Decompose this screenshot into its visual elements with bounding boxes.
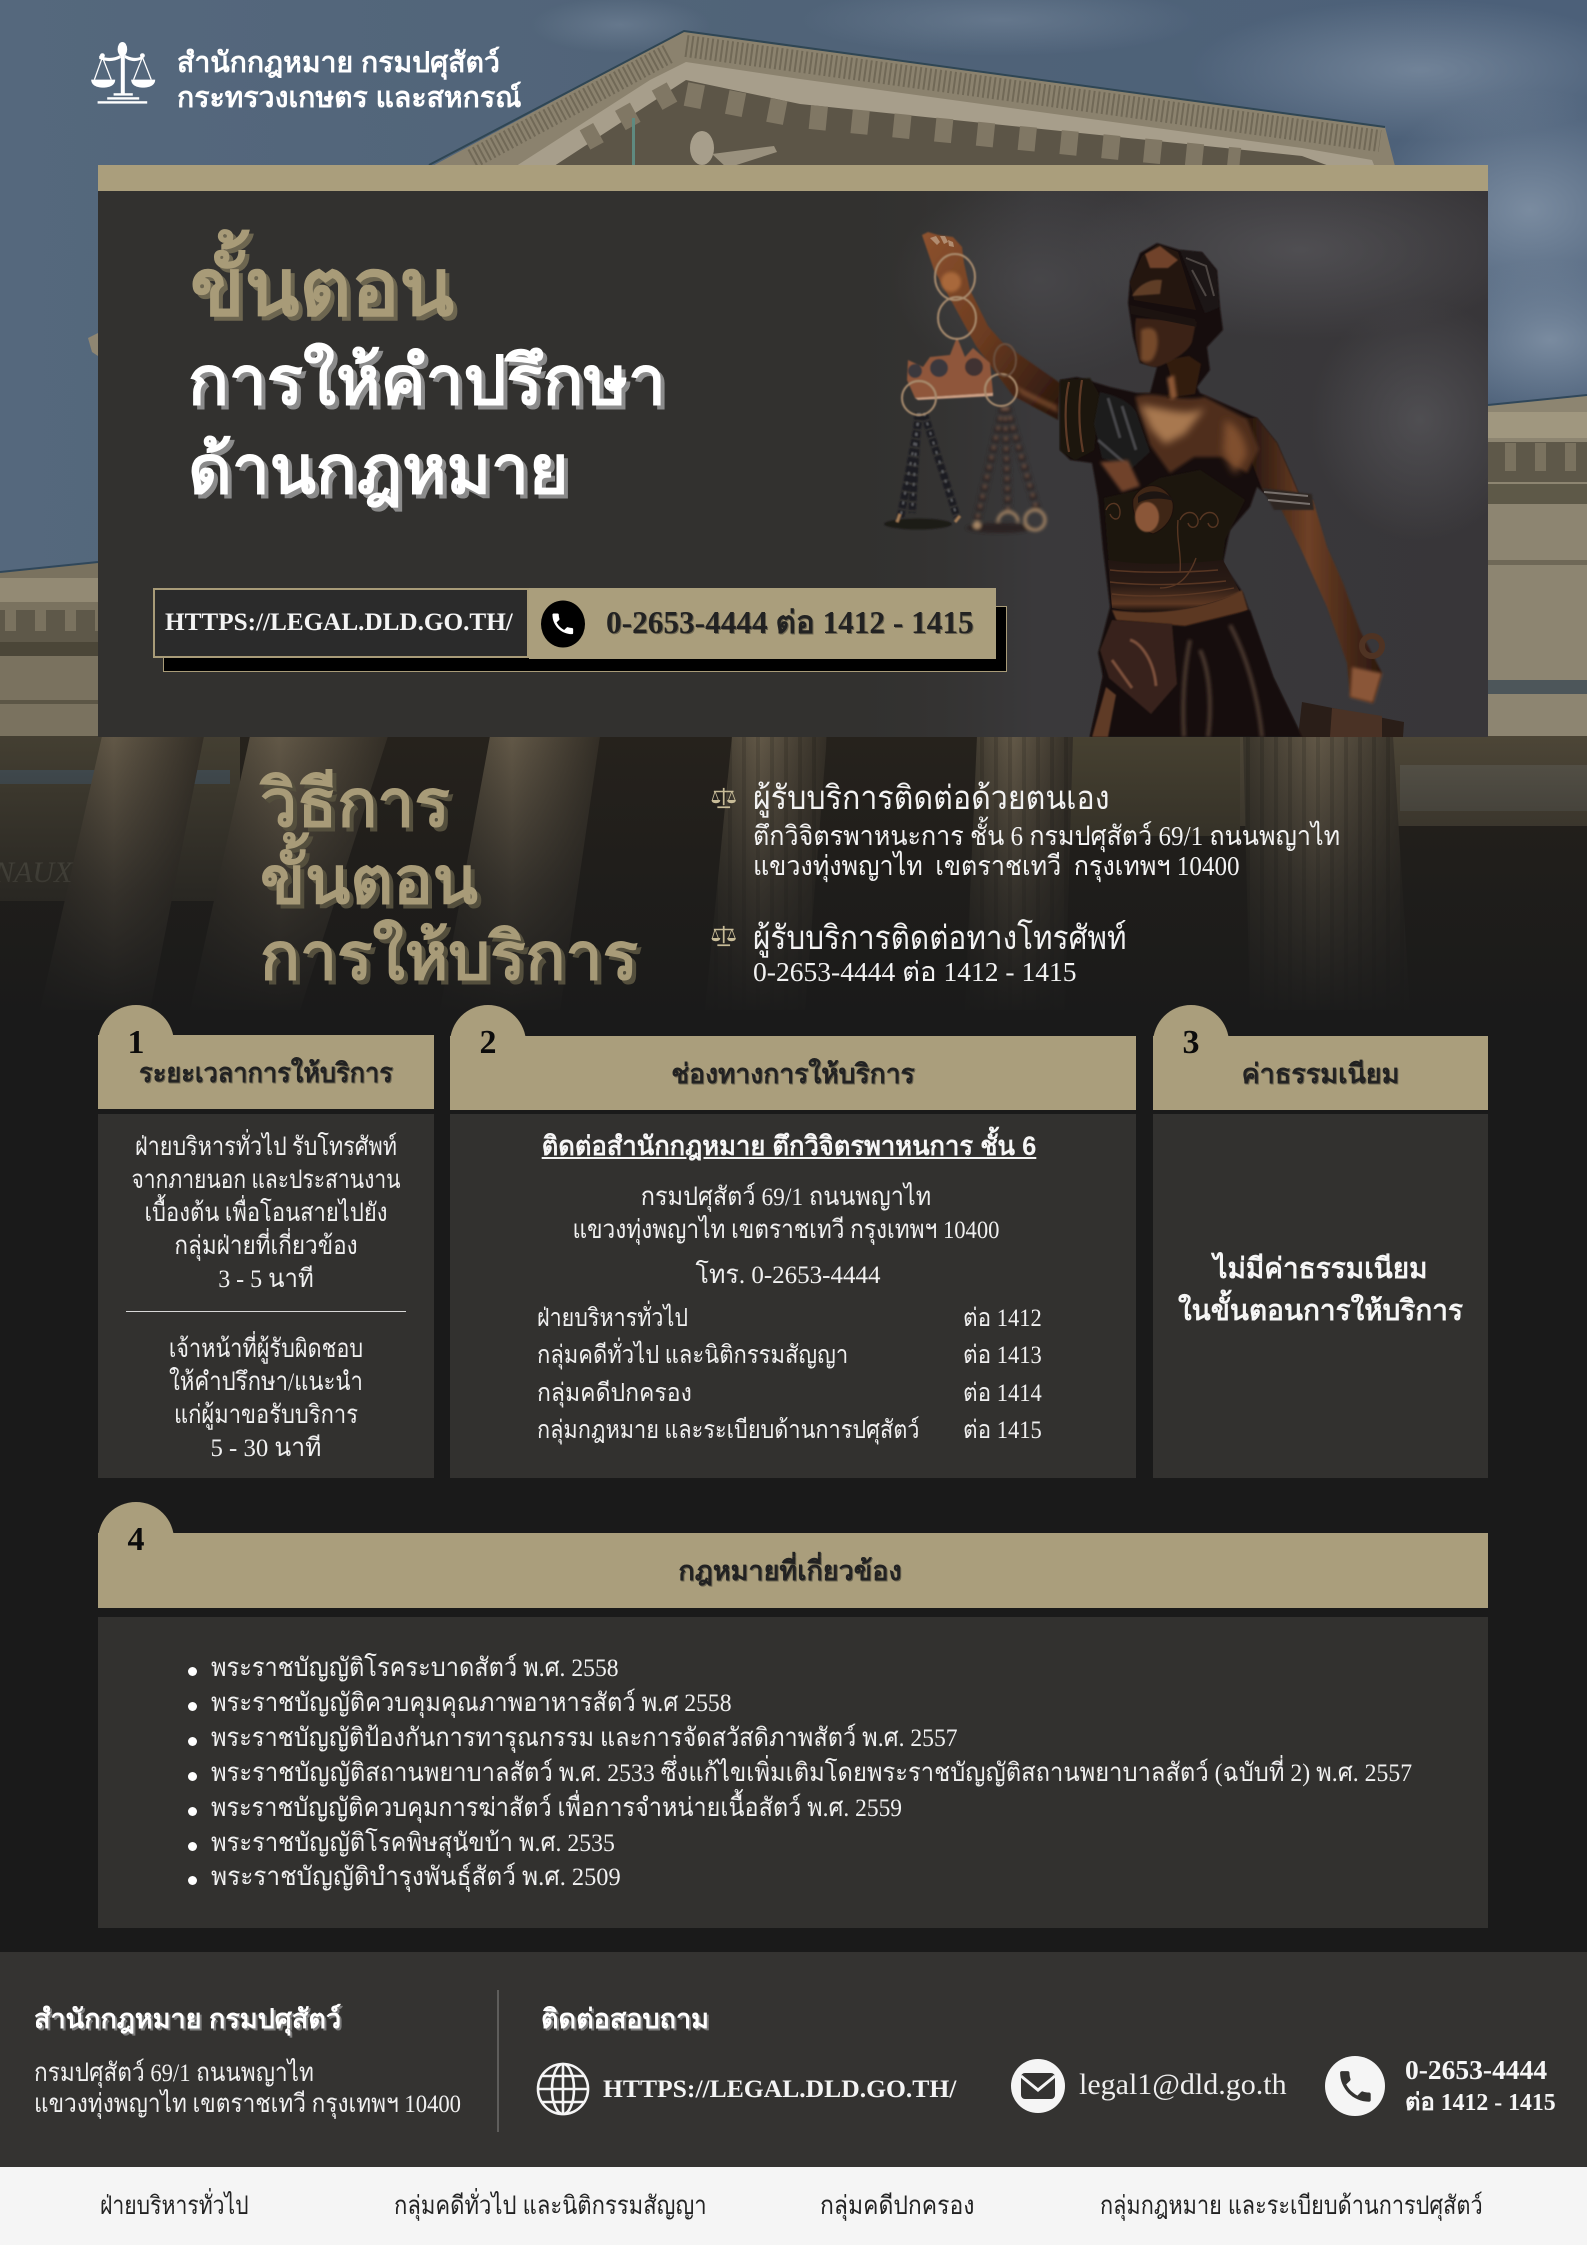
card 2 header: [450, 1036, 1136, 1110]
contact bar: [153, 588, 1007, 672]
in-person heading: ผู้รับบริการติดต่อด้วยตนเอง: [753, 779, 1110, 816]
section heading: service method: วิธีการ: [260, 766, 450, 840]
first step text: [131, 1129, 401, 1292]
list of acts: พระราชบัญญัติบำรุงพันธุ์สัตว์ พ.ศ. 2509: [211, 1862, 621, 1891]
card 2 body: [450, 1114, 1136, 1478]
section heading: service method: [259, 766, 642, 993]
first step text: 3 - 5 นาที: [218, 1264, 314, 1292]
background photo: courthouse and sky: [0, 0, 1587, 982]
footer contact panel: [0, 1952, 1587, 2167]
pediment: [425, 31, 1396, 170]
card 4: related laws: [98, 1502, 1488, 1928]
card 1 number tab: [98, 1005, 174, 1065]
card 2: service channels: [450, 1005, 1136, 1478]
office address: [573, 1182, 999, 1245]
extension names: ฝ่ายบริหารทั่วไป: [537, 1305, 688, 1332]
first step text: จากภายนอก และประสานงาน: [131, 1164, 401, 1194]
list of acts: พระราชบัญญัติสถานพยาบาลสัตว์ พ.ศ. 2533 ซึ่งแก้ไขเพิ่มเติมโดยพระราชบัญญัติสถานพยาบาลสัตว์ (ฉบับที่ 2) พ.ศ. 2557: [211, 1758, 1412, 1787]
second step text: แก่ผู้มาขอรับบริการ: [174, 1400, 358, 1428]
card 1 title: ระยะเวลาการให้บริการ: [139, 1058, 393, 1088]
division: general cases: กลุ่มคดีทั่วไป และนิติกรรมสัญญา: [394, 2192, 707, 2220]
section heading: service method: ขั้นตอน: [260, 842, 478, 916]
card 1 number: 1: [128, 1024, 144, 1061]
bodice: [1104, 470, 1245, 608]
section heading: service method: การให้บริการ: [260, 919, 638, 993]
extension names: กลุ่มคดีปกครอง: [537, 1380, 692, 1407]
left wing: [0, 562, 98, 736]
icon: scales of justice logo: [91, 42, 156, 104]
list of acts: [188, 1653, 1412, 1892]
beam with rings: [902, 254, 1017, 415]
agency name: [177, 46, 522, 114]
extension names: กลุ่มกฎหมาย และระเบียบด้านการปศุสัตว์: [537, 1417, 919, 1444]
website link box: HTTPS://LEGAL.DLD.GO.TH/: [165, 609, 513, 636]
division: general administration: ฝ่ายบริหารทั่วไป: [100, 2192, 249, 2220]
first step text: ฝ่ายบริหารทั่วไป รับโทรศัพท์: [135, 1132, 397, 1160]
list of acts: พระราชบัญญัติควบคุมคุณภาพอาหารสัตว์ พ.ศ 2558: [211, 1688, 732, 1717]
card 3 number tab: [1153, 1005, 1229, 1065]
hero panel: [98, 165, 1488, 737]
footer agency heading: สำนักกฎหมาย กรมปศุสัตว์: [34, 2004, 341, 2034]
chest highlights: [1135, 394, 1259, 473]
extension numbers: ต่อ 1413: [963, 1342, 1042, 1369]
website link box: [153, 588, 529, 658]
icon: phone: [1325, 2056, 1385, 2116]
card 4 number: 4: [128, 1521, 144, 1558]
footer phone numbers: ต่อ 1412 - 1415: [1405, 2090, 1556, 2116]
colonnade: [0, 736, 1587, 1040]
in-person address: แขวงทุ่งพญาไท เขตราชเทวี กรุงเทพฯ 10400: [753, 851, 1240, 881]
phone number: 0-2653-4444 ต่อ 1412 - 1415: [606, 605, 974, 640]
list of acts: พระราชบัญญัติป้องกันการทารุณกรรม และการจัดสวัสดิภาพสัตว์ พ.ศ. 2557: [211, 1723, 958, 1752]
footer phone numbers: [1405, 2054, 1556, 2116]
footer website: HTTPS://LEGAL.DLD.GO.TH/: [603, 2074, 956, 2103]
office phone: โทร. 0-2653-4444: [696, 1260, 880, 1289]
list of acts: พระราชบัญญัติโรคระบาดสัตว์ พ.ศ. 2558: [211, 1653, 619, 1682]
no fee statement: ในขั้นตอนการให้บริการ: [1178, 1295, 1463, 1327]
second step text: เจ้าหน้าที่ผู้รับผิดชอบ: [169, 1334, 363, 1362]
footer contact heading: ติดต่อสอบถาม: [541, 2004, 709, 2034]
title: gold line: ขั้นตอน: [190, 243, 454, 332]
bar shadow: [163, 606, 1007, 672]
list of acts: พระราชบัญญัติควบคุมการฆ่าสัตว์ เพื่อการจำหน่ายเนื้อสัตว์ พ.ศ. 2559: [211, 1793, 902, 1822]
second step text: 5 - 30 นาที: [210, 1432, 322, 1462]
phone box: [529, 588, 996, 659]
telephone number: 0-2653-4444 ต่อ 1412 - 1415: [753, 957, 1077, 987]
card 4 body: [98, 1617, 1488, 1928]
title: white lines: ด้านกฎหมาย: [188, 433, 569, 508]
extension numbers: ต่อ 1414: [963, 1380, 1042, 1407]
card 3 number: 3: [1182, 1024, 1200, 1061]
card 3: fees: [1153, 1005, 1488, 1478]
footer address: กรมปศุสัตว์ 69/1 ถนนพญาไท: [34, 2058, 314, 2087]
service channel: telephone: [712, 919, 1127, 987]
footer address: [34, 2058, 461, 2119]
title: white lines: [188, 342, 666, 512]
agency name: สำนักกฎหมาย กรมปศุสัตว์: [177, 47, 500, 79]
card 1 body: [98, 1114, 434, 1478]
right wing: [1488, 395, 1587, 740]
raised arm: [922, 232, 1060, 420]
card 3 title: ค่าธรรมเนียม: [1242, 1059, 1399, 1089]
face: [1135, 318, 1196, 367]
office address: แขวงทุ่งพญาไท เขตราชเทวี กรุงเทพฯ 10400: [573, 1215, 999, 1244]
card 3 body: [1153, 1114, 1488, 1478]
title: white lines: การให้คำปรึกษา: [188, 344, 666, 419]
telephone heading: ผู้รับบริการติดต่อทางโทรศัพท์: [753, 919, 1127, 956]
icon: globe: [536, 2062, 590, 2116]
card 2 number tab: [450, 1005, 526, 1065]
card 1: service duration: [98, 1005, 434, 1478]
sleeve and drapery: [1060, 378, 1100, 460]
second step text: [169, 1331, 363, 1462]
footer phone numbers: 0-2653-4444: [1405, 2054, 1547, 2085]
card 4 title: กฎหมายที่เกี่ยวข้อง: [678, 1556, 902, 1586]
extension names: [537, 1300, 919, 1444]
agency name: กระทรวงเกษตร และสหกรณ์: [177, 82, 521, 114]
card 4 number tab: [98, 1502, 174, 1562]
card 1 header: [98, 1035, 434, 1109]
icon: email: [1011, 2059, 1065, 2113]
division: law and regulation: กลุ่มกฎหมาย และระเบียบด้านการปศุสัตว์: [1100, 2192, 1483, 2220]
office heading: ติดต่อสำนักกฎหมาย ตึกวิจิตรพาหนการ ชั้น 6: [542, 1130, 1036, 1160]
icon: phone: [541, 600, 585, 648]
footer division strip: [0, 2167, 1587, 2245]
photo: bronze Lady Justice statue: [884, 191, 1488, 737]
list of acts: พระราชบัญญัติโรคพิษสุนัขบ้า พ.ศ. 2535: [211, 1828, 615, 1857]
footer email: legal1@dld.go.th: [1079, 2068, 1287, 2101]
no fee statement: ไม่มีค่าธรรมเนียม: [1213, 1253, 1428, 1285]
first step text: กลุ่มฝ่ายที่เกี่ยวข้อง: [174, 1230, 358, 1260]
first step text: เบื้องต้น เพื่อโอนสายไปยัง: [145, 1198, 387, 1226]
footer address: แขวงทุ่งพญาไท เขตราชเทวี กรุงเทพฯ 10400: [34, 2089, 461, 2118]
card 4 header: [98, 1533, 1488, 1608]
service channel: in person: [712, 779, 1340, 882]
card 3 header: [1153, 1036, 1488, 1110]
tan band: [98, 165, 1488, 191]
scale: chains and pans: [966, 407, 1045, 533]
extension numbers: ต่อ 1412: [963, 1305, 1042, 1332]
card 2 title: ช่องทางการให้บริการ: [671, 1059, 915, 1089]
second step text: ให้คำปรึกษา/แนะนำ: [169, 1366, 363, 1396]
extension names: กลุ่มคดีทั่วไป และนิติกรรมสัญญา: [537, 1342, 848, 1369]
viewer-right arm: [1235, 418, 1382, 703]
in-person address: ตึกวิจิตรพาหนะการ ชั้น 6 กรมปศุสัตว์ 69/1 ถนนพญาไท: [753, 821, 1340, 851]
extension numbers: [963, 1305, 1042, 1444]
statue figure silhouette: [1060, 243, 1302, 737]
no fee statement: [1178, 1252, 1463, 1327]
skirt: [1090, 610, 1302, 737]
extension numbers: ต่อ 1415: [963, 1417, 1042, 1444]
in-person address: [753, 816, 1340, 882]
card 2 number: 2: [480, 1024, 496, 1061]
icon: scales bullet: [712, 926, 736, 946]
icon: scales bullet: [712, 788, 736, 808]
division: administrative cases: กลุ่มคดีปกครอง: [820, 2192, 974, 2220]
office address: กรมปศุสัตว์ 69/1 ถนนพญาไท: [641, 1182, 931, 1211]
header logo and agency name: [91, 42, 522, 114]
